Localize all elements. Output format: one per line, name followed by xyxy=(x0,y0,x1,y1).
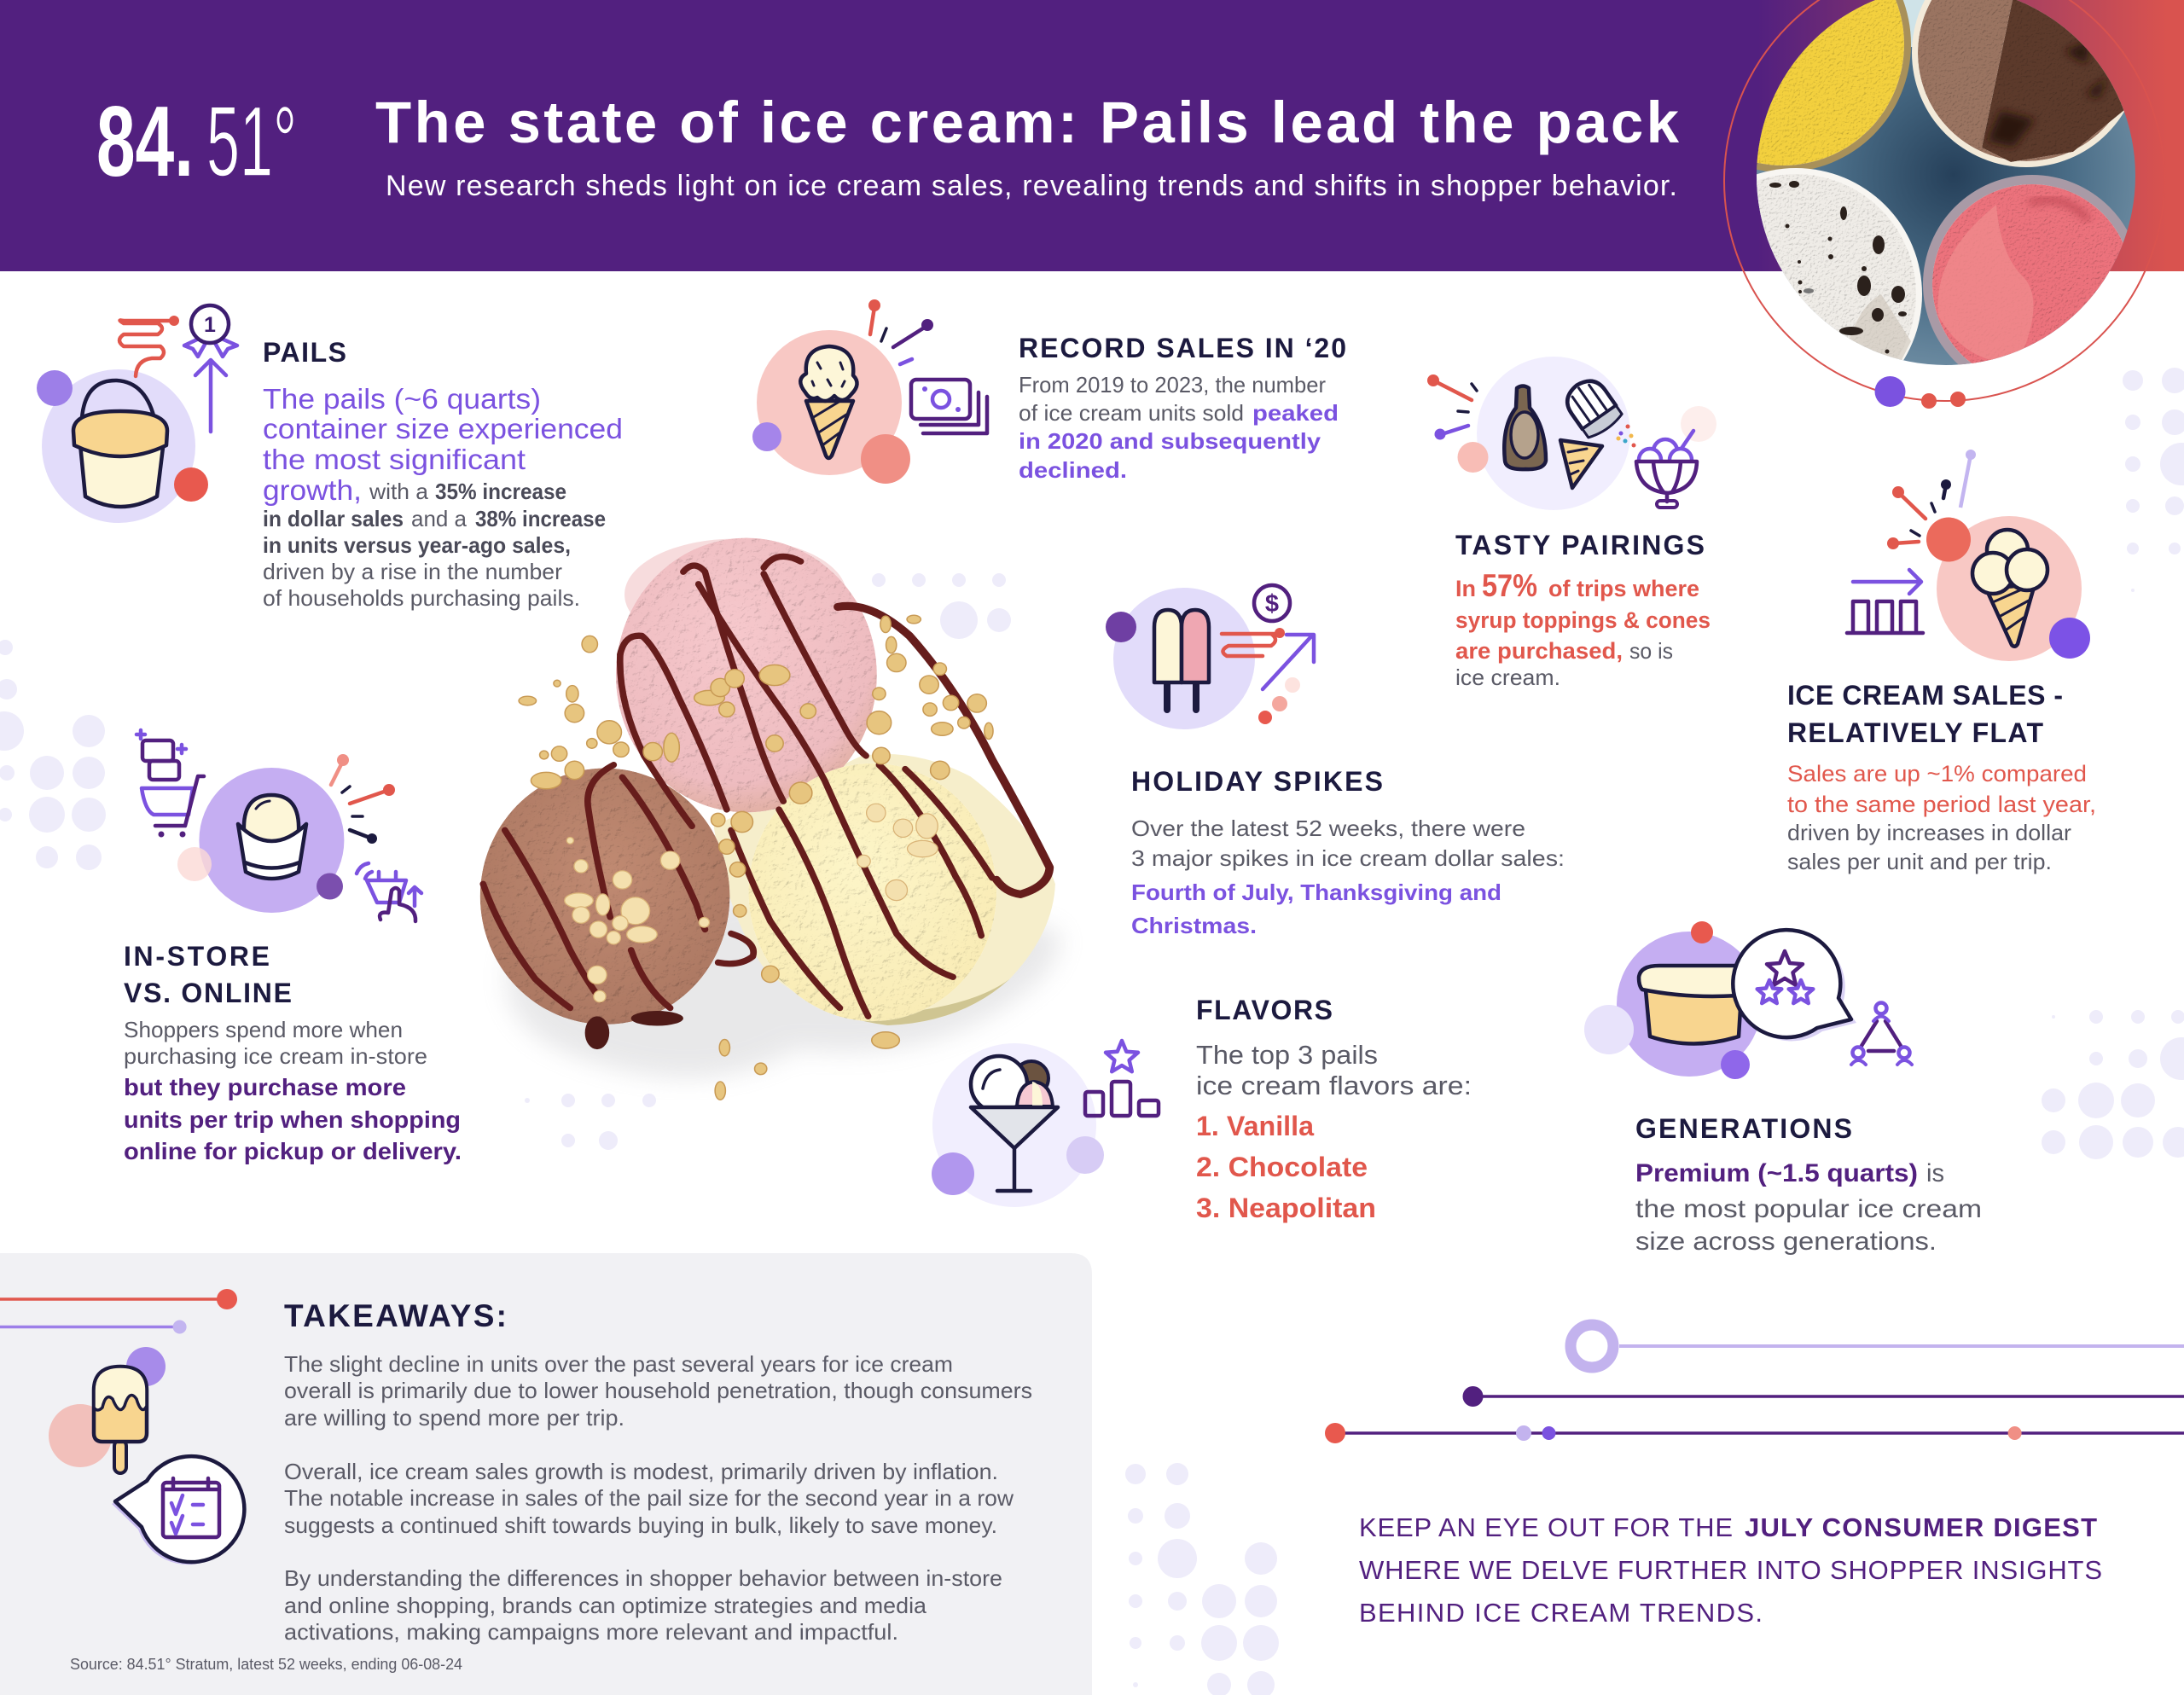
panel: ice cream sales relatively flat xyxy=(1787,450,2096,874)
text: generations body: is xyxy=(1926,1159,1944,1187)
header band xyxy=(0,0,2184,271)
text: generations body: the most popular ice cream xyxy=(1635,1195,1982,1223)
text: tasty pairings body: 57% xyxy=(1482,568,1537,603)
text: generations body xyxy=(1635,1159,1982,1256)
text: takeaway paragraph 3: activations, making campaigns more relevant and impactful. xyxy=(284,1619,898,1645)
panel: tasty pairings xyxy=(1427,357,1716,690)
icon: ice cream cone with money xyxy=(752,299,987,484)
text: tasty pairings body: so is xyxy=(1629,638,1673,664)
text: takeaway paragraph 2: suggests a continued shift towards buying in bulk, likely to save money. xyxy=(284,1512,997,1538)
text: ice cream sales body: to the same period last year, xyxy=(1787,792,2096,817)
text: record sales body: declined. xyxy=(1019,457,1127,483)
text: record sales body xyxy=(1019,372,1339,483)
text: pails body xyxy=(263,383,623,611)
title: The state of ice cream: Pails lead the pack xyxy=(375,90,1680,155)
text: flavors intro xyxy=(1196,1040,1472,1100)
text: pails body: 35% increase xyxy=(435,479,566,504)
text: holiday spikes body: 3 major spikes in ice cream dollar sales: xyxy=(1131,845,1565,871)
text: flavors intro: The top 3 pails xyxy=(1196,1040,1378,1070)
text: pails body: with a xyxy=(369,479,429,504)
text: takeaway paragraph 2: The notable increase in sales of the pail size for the second year in a row xyxy=(284,1485,1014,1511)
heading: in-store vs online xyxy=(124,941,292,1008)
panel: generations xyxy=(1584,921,1982,1256)
subtitle: New research sheds light on ice cream sales, revealing trends and shifts in shopper behavior. xyxy=(386,170,1677,202)
heading: pails: PAILS xyxy=(263,337,346,368)
heading: in-store vs online: IN-STORE xyxy=(124,941,270,972)
icon: syrup, sprinkles, cone and sundae xyxy=(1427,357,1716,510)
text: pails body: growth, xyxy=(263,474,362,506)
text: record sales body: peaked xyxy=(1252,400,1339,426)
text: record sales body: of ice cream units sold xyxy=(1019,400,1244,426)
list: top flavors: 1. Vanilla xyxy=(1196,1111,1314,1141)
header photo: four ice cream tubs in circle xyxy=(1723,0,2146,402)
text: pails body: in units versus year-ago sales, xyxy=(263,532,571,558)
text: in-store vs online body: but they purchase more xyxy=(124,1074,406,1100)
text: in-store vs online body xyxy=(124,1017,462,1164)
text: record sales body: From 2019 to 2023, the number xyxy=(1019,372,1326,398)
logo: 84.51 degrees xyxy=(96,85,297,197)
text: in-store vs online body: units per trip when shopping xyxy=(124,1106,461,1133)
heading: tasty pairings: TASTY PAIRINGS xyxy=(1455,530,1705,560)
text: pails body: and a xyxy=(411,506,468,531)
source note: Source: 84.51° Stratum, latest 52 weeks, ending 06-08-24 xyxy=(70,1656,462,1673)
ring accent dots xyxy=(1875,376,1966,409)
text: holiday spikes body: Christmas. xyxy=(1131,913,1257,938)
text: flavors intro: ice cream flavors are: xyxy=(1196,1071,1472,1100)
text: tasty pairings body: of trips where xyxy=(1548,576,1699,601)
list: top flavors xyxy=(1196,1111,1376,1223)
panel: record sales xyxy=(752,299,1346,484)
text: takeaway paragraph 3: and online shopping, brands can optimize strategies and media xyxy=(284,1593,927,1618)
timeline lines with dots xyxy=(1325,1325,2184,1443)
text: pails body: driven by a rise in the number xyxy=(263,559,562,584)
text: tasty pairings body xyxy=(1455,568,1711,690)
callout: July consumer digest: BEHIND ICE CREAM TRENDS. xyxy=(1359,1598,1763,1628)
heading: takeaways: TAKEAWAYS: xyxy=(284,1298,507,1333)
icon: tub, shopping cart and mobile basket xyxy=(136,730,421,921)
icon: pail with medal and growth arrow: 1 xyxy=(204,313,216,337)
heading: record sales: RECORD SALES IN ‘20 xyxy=(1019,333,1346,363)
heading: holiday spikes: HOLIDAY SPIKES xyxy=(1131,766,1383,797)
text: takeaway paragraph 3: By understanding the differences in shopper behavior between in-store xyxy=(284,1565,1002,1591)
text: ice cream sales body: sales per unit and per trip. xyxy=(1787,849,2052,874)
text: holiday spikes body: Over the latest 52 weeks, there were xyxy=(1131,816,1525,841)
icon: martini glass sundae with ranked bars xyxy=(932,1041,1159,1207)
list: top flavors: 3. Neapolitan xyxy=(1196,1193,1376,1223)
panel: holiday spikes xyxy=(1106,585,1565,938)
text: tasty pairings body: ice cream. xyxy=(1455,665,1560,690)
heading: flavors: FLAVORS xyxy=(1196,995,1333,1025)
icon: triple scoop cone with flat bars xyxy=(1847,450,2090,661)
decorative dot pattern: lower right xyxy=(2042,1010,2184,1159)
panel: pails xyxy=(37,305,623,611)
heading: ice cream sales: RELATIVELY FLAT xyxy=(1787,717,2043,748)
text: pails body: of households purchasing pails. xyxy=(263,585,580,611)
icon: pail with medal and growth arrow xyxy=(37,305,237,523)
heading: ice cream sales xyxy=(1787,680,2063,748)
text: pails body: The pails (~6 quarts) xyxy=(263,383,541,415)
text: pails body: in dollar sales xyxy=(263,506,404,531)
text: takeaway paragraph 3 xyxy=(284,1565,1002,1645)
text: ice cream sales body: driven by increases in dollar xyxy=(1787,820,2071,845)
text: in-store vs online body: purchasing ice cream in-store xyxy=(124,1043,427,1069)
list: top flavors: 2. Chocolate xyxy=(1196,1152,1368,1182)
icon: popsicles with dollar and rising arrow xyxy=(1106,585,1314,729)
text: takeaway paragraph 2 xyxy=(284,1459,1014,1538)
heading: in-store vs online: VS. ONLINE xyxy=(124,978,292,1008)
panel: in-store vs online xyxy=(124,730,462,1164)
decorative dot pattern: around photo xyxy=(525,573,1011,1150)
text: pails body: container size experienced xyxy=(263,413,623,444)
callout: July consumer digest: KEEP AN EYE OUT FOR THE xyxy=(1359,1512,1733,1542)
text: takeaway paragraph 1: overall is primarily due to lower household penetration, though consumers xyxy=(284,1378,1032,1403)
text: ice cream sales body: Sales are up ~1% compared xyxy=(1787,761,2087,787)
icon: popsicles with dollar and rising arrow: $ xyxy=(1265,590,1279,618)
text: tasty pairings body: syrup toppings & cones xyxy=(1455,607,1711,633)
logo: 84.51 degrees: 51° xyxy=(206,85,297,197)
callout: July consumer digest xyxy=(1359,1512,2102,1628)
icon: tub with rating bubble and people network xyxy=(1584,921,1912,1079)
accent lines with dots xyxy=(0,1289,237,1334)
text: generations body: size across generations. xyxy=(1635,1228,1937,1256)
icon: popsicle and calendar checklist bubble xyxy=(49,1347,244,1564)
panel: takeaways xyxy=(0,1253,1092,1695)
text: in-store vs online body: Shoppers spend more when xyxy=(124,1017,403,1042)
decorative dot pattern: top right xyxy=(2123,368,2184,592)
text: tasty pairings body: In xyxy=(1455,576,1476,601)
text: tasty pairings body: are purchased, xyxy=(1455,638,1623,664)
text: in-store vs online body: online for pickup or delivery. xyxy=(124,1138,462,1164)
text: pails body: 38% increase xyxy=(475,506,606,531)
heading: ice cream sales: ICE CREAM SALES - xyxy=(1787,680,2063,711)
text: takeaway paragraph 2: Overall, ice cream sales growth is modest, primarily driven by inflation. xyxy=(284,1459,998,1484)
decorative dot pattern: left xyxy=(0,640,106,870)
text: ice cream sales body xyxy=(1787,761,2096,874)
text: record sales body: in 2020 and subsequently xyxy=(1019,428,1321,454)
callout: July consumer digest: JULY CONSUMER DIGEST xyxy=(1745,1512,2097,1542)
text: takeaway paragraph 1: The slight decline in units over the past several years for ice cream xyxy=(284,1351,953,1377)
heading: generations: GENERATIONS xyxy=(1635,1113,1852,1144)
text: takeaway paragraph 1: are willing to spend more per trip. xyxy=(284,1405,624,1431)
decorative dot pattern: bottom center xyxy=(1125,1463,1279,1695)
text: holiday spikes body: Fourth of July, Thanksgiving and xyxy=(1131,879,1502,905)
logo: 84.51 degrees: 84. xyxy=(96,85,194,197)
callout: July consumer digest: WHERE WE DELVE FURTHER INTO SHOPPER INSIGHTS xyxy=(1359,1555,2102,1585)
text: takeaway paragraph 1 xyxy=(284,1351,1032,1431)
panel: flavors xyxy=(932,995,1472,1223)
central photo: three scoops of ice cream with chocolate drizzle xyxy=(480,538,1060,1100)
text: generations body: Premium (~1.5 quarts) xyxy=(1635,1159,1918,1187)
text: pails body: the most significant xyxy=(263,444,526,475)
text: holiday spikes body xyxy=(1131,816,1565,938)
